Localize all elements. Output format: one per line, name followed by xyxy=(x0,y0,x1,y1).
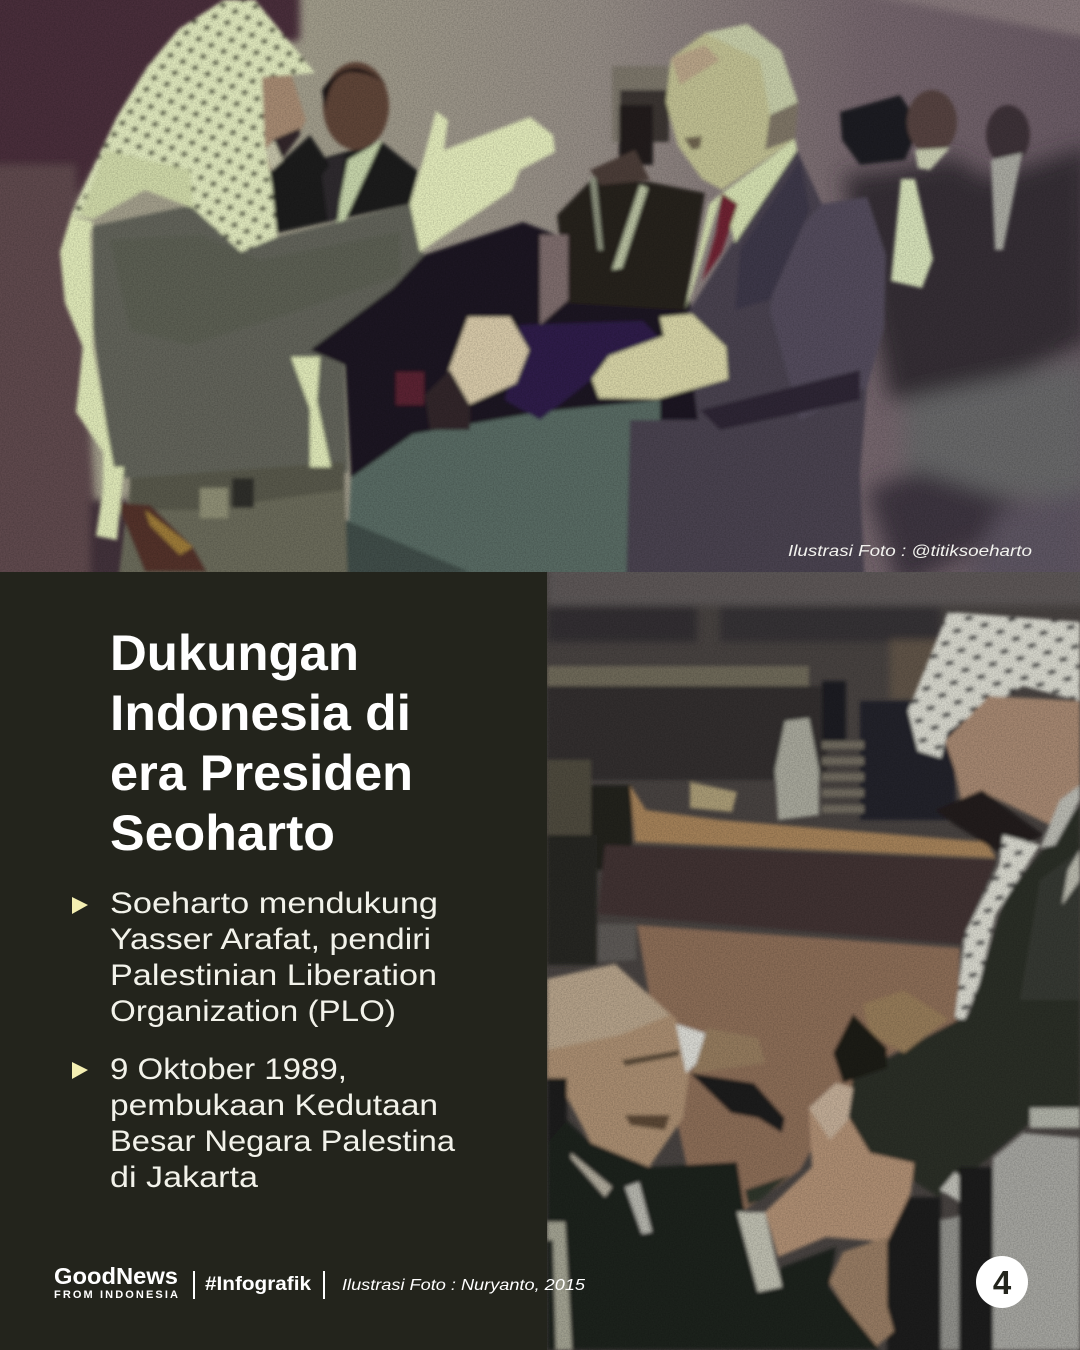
bullet text xyxy=(110,887,438,1028)
footer xyxy=(54,1263,585,1301)
panel: text background xyxy=(0,572,547,1350)
scarf xyxy=(955,835,1040,1019)
dagger xyxy=(117,503,207,572)
Soeharto suit xyxy=(547,1120,880,1350)
hashtag: #Infografik xyxy=(205,1274,311,1295)
page number xyxy=(976,1256,1028,1308)
face xyxy=(945,696,1080,825)
bullet text xyxy=(110,1053,455,1194)
white microphone cover xyxy=(676,1024,707,1073)
keffiyeh xyxy=(71,0,315,252)
hands xyxy=(763,1110,917,1258)
shirt xyxy=(722,139,797,243)
heading: Dukungan xyxy=(110,625,359,681)
microphone stand xyxy=(547,1222,572,1350)
photo credit: bottom: Ilustrasi Foto : Nuryanto, 2015 xyxy=(342,1277,585,1294)
Soeharto suit xyxy=(626,152,868,572)
face xyxy=(262,75,306,147)
bullet text: pembukaan Kedutaan xyxy=(110,1089,438,1122)
wall xyxy=(637,925,960,1210)
Arafat body xyxy=(846,805,1080,1197)
wine glass xyxy=(396,372,424,405)
background doorframe xyxy=(612,66,669,142)
man behind xyxy=(275,142,418,233)
camera operator xyxy=(840,95,920,165)
Arafat uniform xyxy=(93,204,424,478)
dark background below arm xyxy=(310,222,705,478)
bullet text: Soeharto mendukung xyxy=(110,887,438,920)
keffiyeh fringe left xyxy=(60,215,124,540)
bullet text: Palestinian Liberation xyxy=(110,959,437,992)
tie xyxy=(702,193,738,281)
bullet text: Yasser Arafat, pendiri xyxy=(110,923,431,956)
keffiyeh fringe right xyxy=(291,357,331,467)
bullet text: Besar Negara Palestina xyxy=(110,1125,455,1158)
page number: 4 xyxy=(993,1264,1012,1301)
icon: triangle bullet xyxy=(72,897,88,914)
bullet text: di Jakarta xyxy=(110,1161,258,1194)
wall low left xyxy=(540,235,568,325)
microphones xyxy=(693,1028,765,1073)
Soeharto head xyxy=(547,964,690,1167)
purple sleeve xyxy=(505,321,660,420)
keffiyeh xyxy=(908,612,1080,758)
logo: GoodNews from Indonesia xyxy=(54,1263,178,1301)
photographer left xyxy=(557,179,705,310)
bullet text: Organization (PLO) xyxy=(110,995,396,1028)
photo: Arafat and Soeharto greeting xyxy=(0,0,1080,590)
logo: GoodNews from Indonesia: GoodNews xyxy=(54,1263,178,1289)
head xyxy=(666,24,798,190)
sofa xyxy=(345,400,660,590)
heading xyxy=(110,625,413,861)
heading: Indonesia di xyxy=(110,685,411,741)
shirt xyxy=(1030,1108,1080,1128)
belt xyxy=(130,462,344,510)
table xyxy=(630,785,996,858)
bullet text: 9 Oktober 1989, xyxy=(110,1053,347,1086)
heading: era Presiden xyxy=(110,745,413,801)
logo: GoodNews from Indonesia: FROM INDONESIA xyxy=(54,1289,178,1301)
beard xyxy=(935,790,1044,855)
ladder xyxy=(822,741,864,813)
photo credit: top: Ilustrasi Foto : @titiksoeharto xyxy=(788,543,1032,560)
heading: Seoharto xyxy=(110,805,335,861)
bottle xyxy=(775,718,819,820)
icon: triangle bullet xyxy=(72,1062,88,1079)
hands xyxy=(592,314,728,399)
raised hand xyxy=(410,111,555,252)
left column xyxy=(547,760,591,835)
bullet item: 9 Oktober 1989 xyxy=(72,1053,455,1194)
bullet item: Soeharto mendukung xyxy=(72,887,438,1028)
photo: Soeharto shaking hands with Arafat xyxy=(547,565,1080,1350)
